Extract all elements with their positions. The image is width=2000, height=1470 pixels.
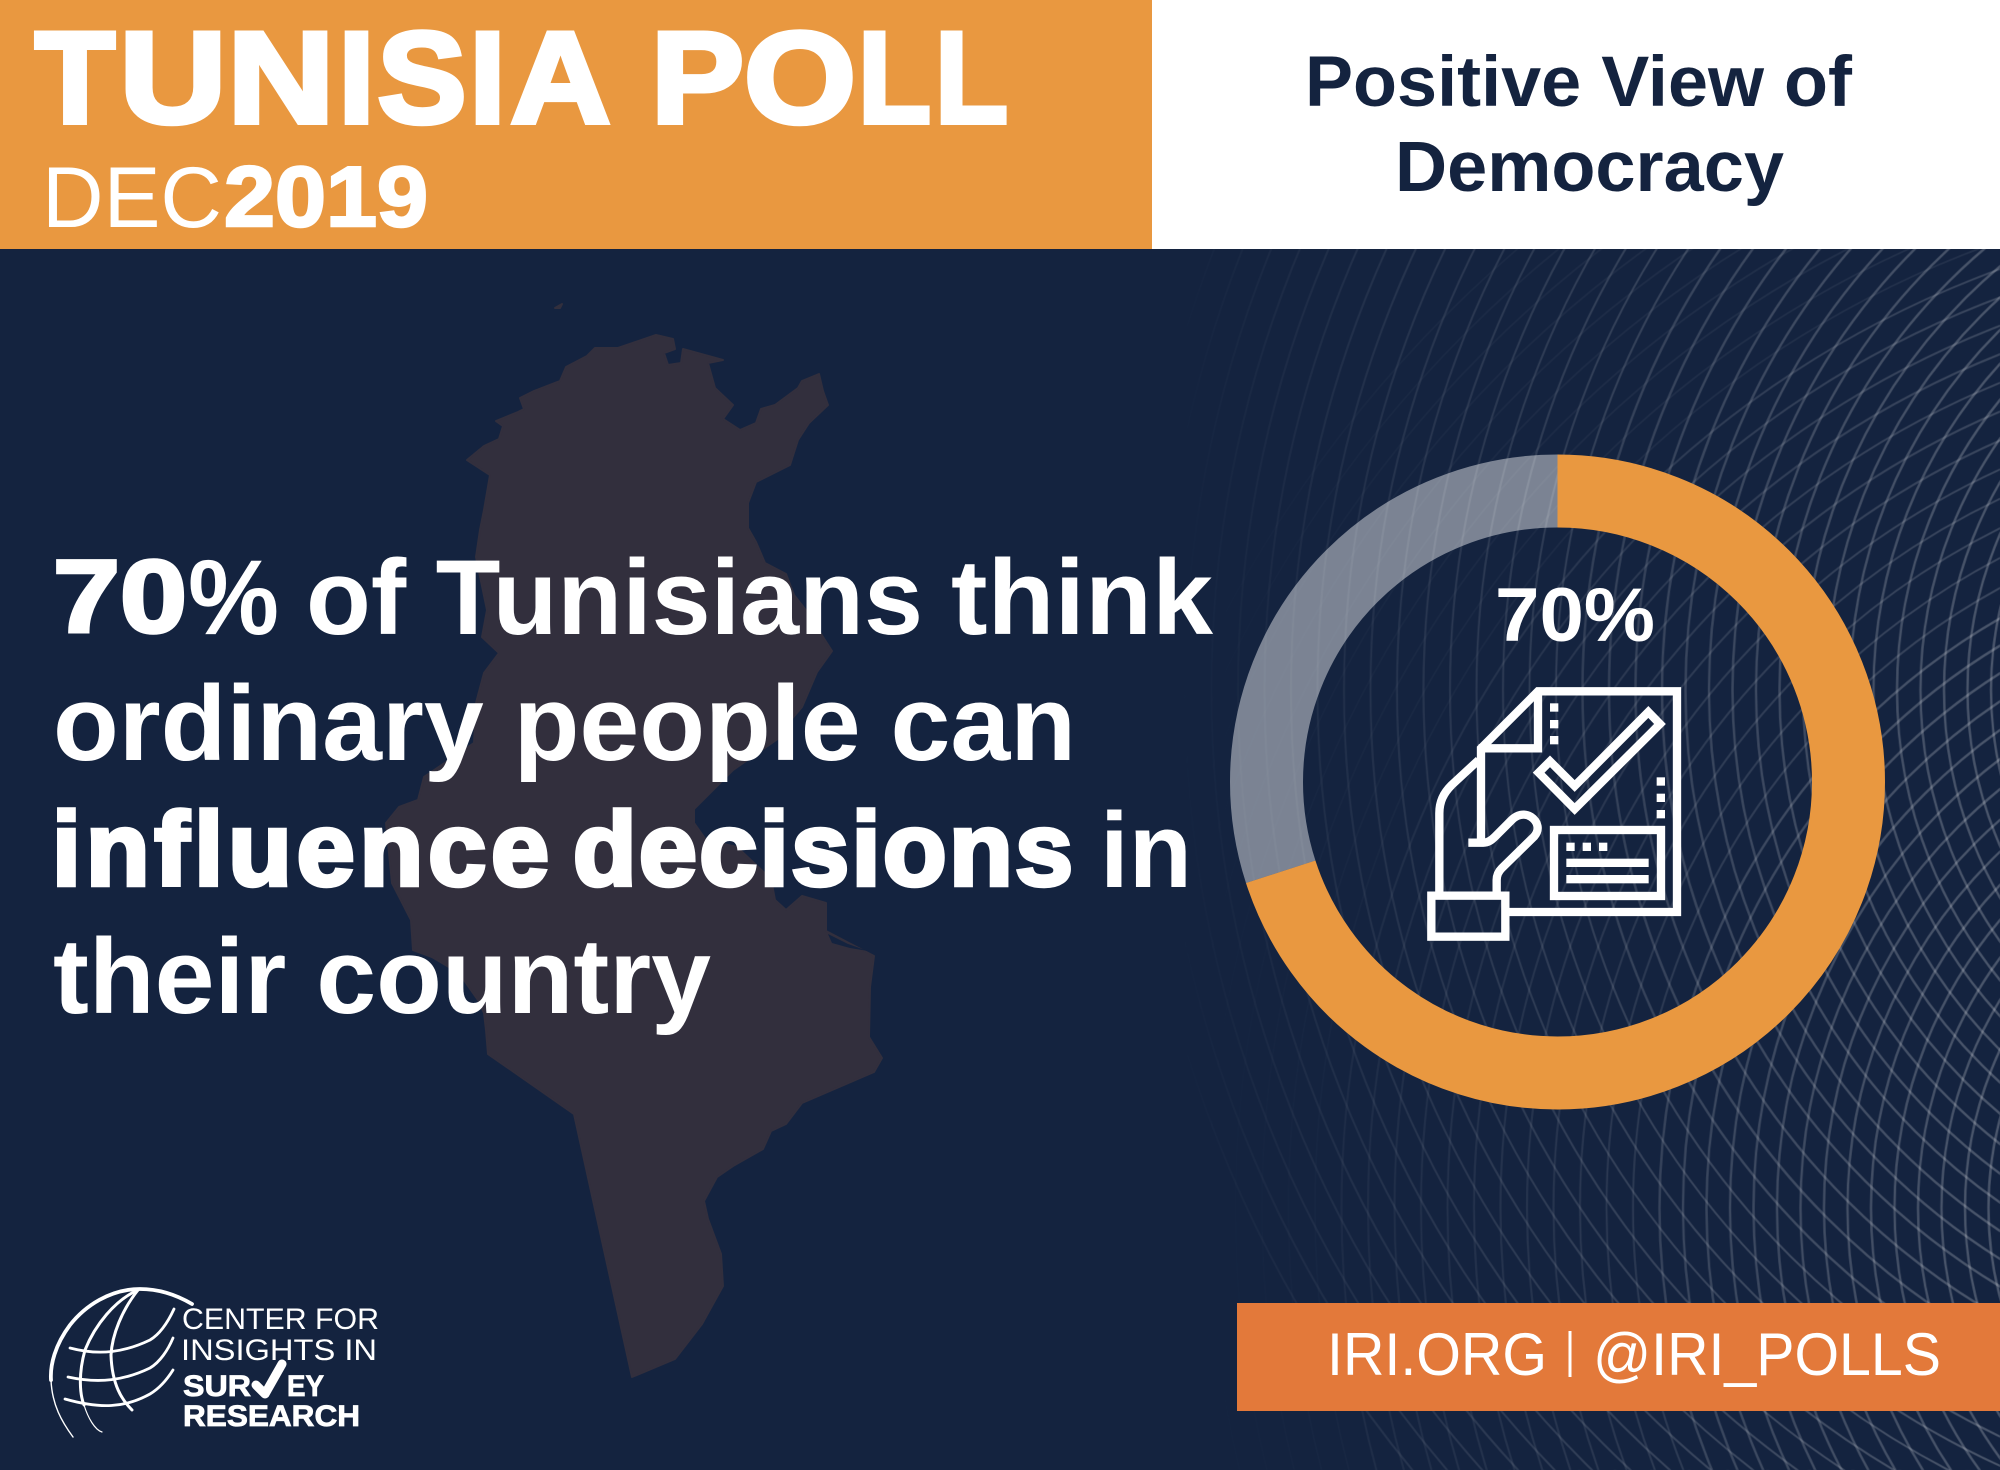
logo text: INSIGHTS IN xyxy=(181,1334,377,1367)
donut value label: 70% xyxy=(1495,573,1655,658)
header: white topic panel xyxy=(1152,0,2000,249)
map detail: Djerba channel xyxy=(828,934,868,951)
topic heading: Positive View of Democracy: Positive View of xyxy=(1305,43,1852,122)
icon: hand holding ballot with checkmark xyxy=(1431,691,1677,937)
main statement text: ordinary people can xyxy=(53,663,1076,783)
logo icon: globe xyxy=(51,1289,192,1437)
logo: Center for Insights in Survey Research xyxy=(51,1289,379,1437)
title: Tunisia Poll: N xyxy=(228,4,334,150)
logo text xyxy=(181,1303,379,1433)
logo text: CENTER FOR xyxy=(182,1303,379,1336)
title: Tunisia Poll xyxy=(35,4,1008,150)
date: Dec 2019 xyxy=(42,150,428,246)
logo icon: checkmark xyxy=(256,1364,282,1394)
donut chart: 70 percent xyxy=(1266,491,1848,1073)
title: Tunisia Poll: L xyxy=(858,4,931,150)
title: Tunisia Poll: I xyxy=(338,4,374,150)
date: Dec 2019: 2019 xyxy=(224,150,428,245)
main statement text: in xyxy=(1100,790,1192,910)
footer bar: website and handle: IRI.ORG xyxy=(1327,1321,1547,1388)
map: silhouette of Tunisia xyxy=(386,304,882,1377)
title: Tunisia Poll: O xyxy=(744,4,856,150)
main statement text: influence xyxy=(52,792,549,908)
logo text: SUR xyxy=(183,1370,251,1403)
title: Tunisia Poll: S xyxy=(378,4,466,150)
header: orange title panel xyxy=(0,0,1152,249)
main statement text: decisions xyxy=(573,792,1073,908)
date: Dec 2019: DEC xyxy=(42,150,222,246)
title: Tunisia Poll: T xyxy=(35,4,115,150)
main statement text: % xyxy=(188,537,279,657)
footer bar: website and handle xyxy=(1237,1303,2000,1411)
title: Tunisia Poll: A xyxy=(510,4,610,150)
title: Tunisia Poll: U xyxy=(120,4,226,150)
main statement text: 70 xyxy=(53,539,187,654)
main statement text xyxy=(52,537,1213,1036)
topic heading: Positive View of Democracy: Democracy xyxy=(1395,128,1785,207)
main statement text: of Tunisians xyxy=(306,537,923,657)
title: Tunisia Poll: I xyxy=(470,4,506,150)
footer bar: website and handle: @IRI_POLLS xyxy=(1593,1321,1941,1388)
main statement text: think xyxy=(951,537,1213,657)
main statement text: their country xyxy=(53,916,711,1036)
title: Tunisia Poll: P xyxy=(651,4,744,150)
logo text: EY xyxy=(287,1370,324,1403)
logo text: RESEARCH xyxy=(183,1400,360,1433)
topic heading: Positive View of Democracy xyxy=(1305,43,1852,207)
title: Tunisia Poll: L xyxy=(935,4,1008,150)
